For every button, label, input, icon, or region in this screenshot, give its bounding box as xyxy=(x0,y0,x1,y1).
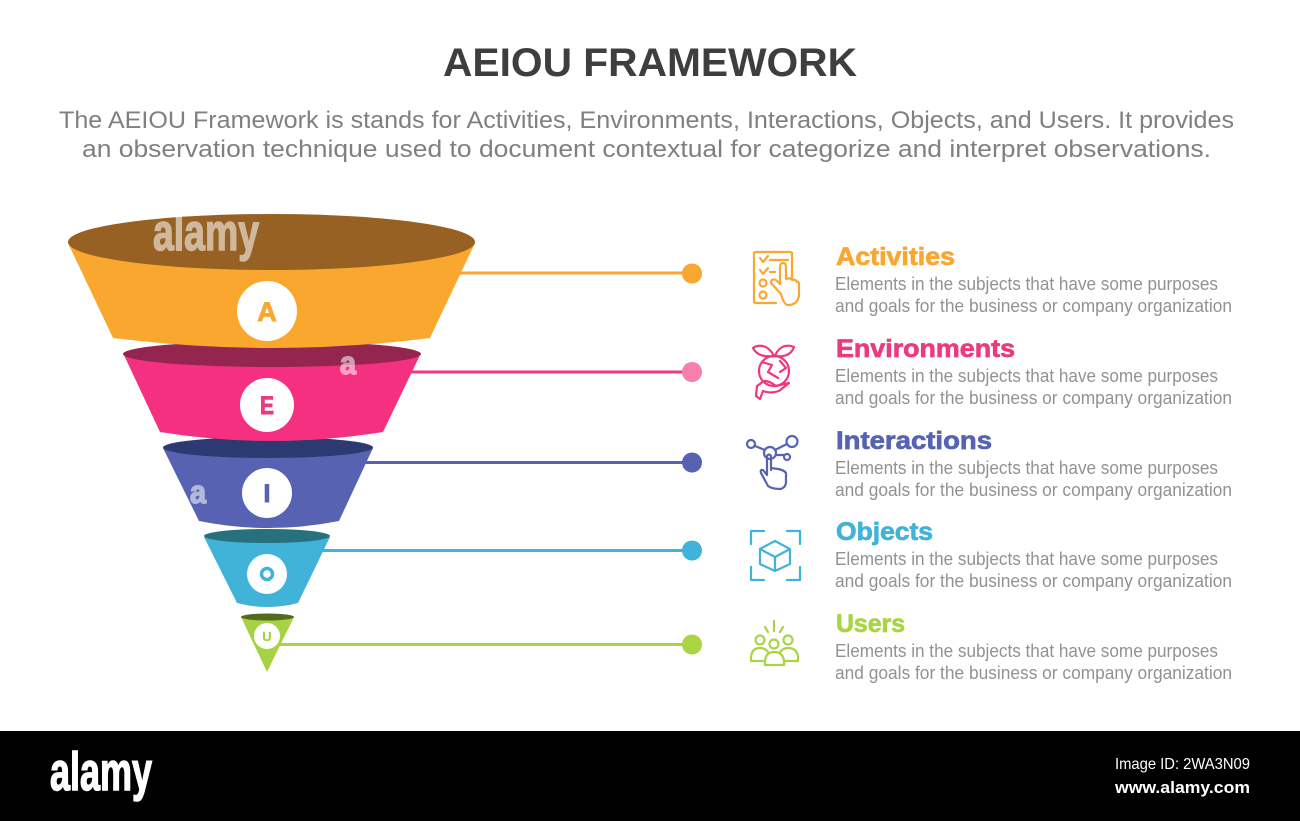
icon: plant and globe on hand xyxy=(753,346,794,399)
item: Objects xyxy=(835,518,1232,591)
item: Activities: Activities xyxy=(836,243,955,271)
icon: checklist with pointing hand xyxy=(754,252,799,305)
item: Interactions: Elements in the subjects that have some purposes xyxy=(835,458,1218,478)
funnel segment E: E xyxy=(260,392,274,420)
funnel segment U xyxy=(241,614,294,672)
footer logo: alamy xyxy=(50,742,152,802)
item: Activities: and goals for the business or company organization xyxy=(835,296,1232,316)
funnel segment E xyxy=(123,341,421,441)
item: Environments xyxy=(835,335,1232,408)
watermarks: a xyxy=(190,474,206,510)
item: Environments: Environments xyxy=(836,335,1015,363)
connector lines and end dots xyxy=(270,264,702,654)
item: Interactions xyxy=(835,427,1232,500)
item: Interactions: Interactions xyxy=(836,427,992,455)
item: Users: Users xyxy=(836,610,905,638)
funnel segment O xyxy=(204,529,330,607)
item: Objects: Elements in the subjects that have some purposes xyxy=(835,549,1218,569)
funnel segment A xyxy=(68,214,475,348)
watermarks xyxy=(153,204,356,510)
funnel segment A: A xyxy=(257,297,277,327)
item: Environments: Elements in the subjects that have some purposes xyxy=(835,366,1218,386)
item: Activities: Elements in the subjects that have some purposes xyxy=(835,274,1218,294)
footer website: www.alamy.com xyxy=(1114,778,1250,797)
title: AEIOU FRAMEWORK xyxy=(443,41,857,85)
item: Environments: and goals for the business or company organization xyxy=(835,388,1232,408)
item: Users: and goals for the business or company organization xyxy=(835,663,1232,683)
watermarks: a xyxy=(340,345,356,381)
item: Users: Elements in the subjects that have some purposes xyxy=(835,641,1218,661)
item: Interactions: and goals for the business or company organization xyxy=(835,480,1232,500)
item: Objects: and goals for the business or company organization xyxy=(835,571,1232,591)
subtitle text block: The AEIOU Framework is stands for Activities, Environments, Interactions, Objects, and Users. It provides xyxy=(59,107,1234,134)
footer image id: Image ID: 2WA3N09 xyxy=(1115,756,1250,773)
icon: touch network xyxy=(747,436,798,489)
subtitle text block xyxy=(59,107,1234,163)
footer bar xyxy=(0,731,1300,821)
item: Objects: Objects xyxy=(836,518,933,546)
subtitle text block: an observation technique used to document contextual for categorize and interpret observations. xyxy=(82,136,1211,163)
funnel xyxy=(68,214,475,672)
watermarks: alamy xyxy=(153,204,259,262)
item: Users xyxy=(835,610,1232,683)
item: Activities xyxy=(835,243,1232,316)
icon: group of users xyxy=(751,621,798,665)
funnel segment U: U xyxy=(262,629,272,644)
icon: cube in focus frame xyxy=(751,531,800,580)
funnel segment I xyxy=(163,437,373,528)
funnel segment I: I xyxy=(264,480,270,508)
